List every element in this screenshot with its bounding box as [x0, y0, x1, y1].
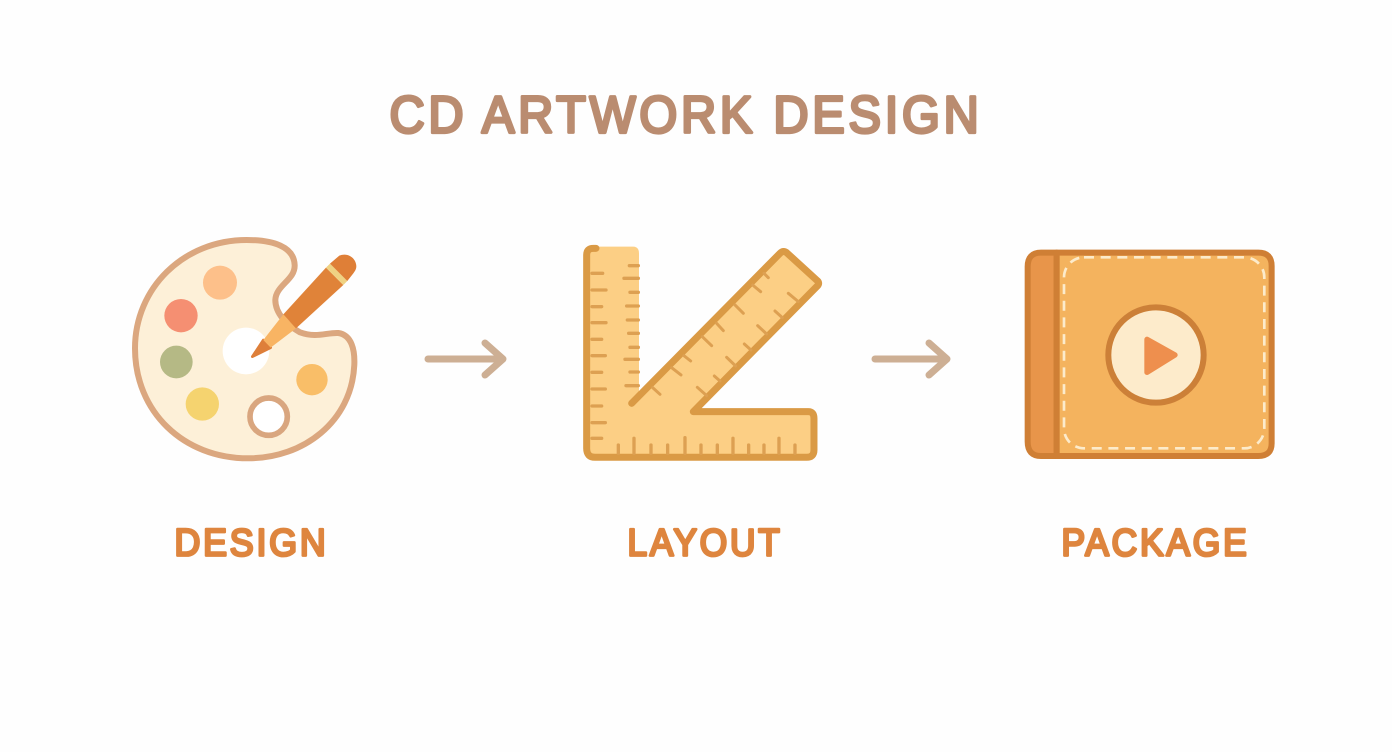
ruler outline — [587, 248, 819, 457]
title: CD ARTWORK DESIGN — [390, 86, 982, 144]
paintbrush — [252, 255, 356, 357]
stitching — [1064, 257, 1264, 448]
case front — [1057, 253, 1272, 456]
play disc — [1108, 307, 1204, 403]
icon: paint palette — [135, 240, 356, 458]
paint dabs — [160, 266, 328, 435]
play triangle — [1147, 339, 1175, 372]
arrow: layout to package — [875, 343, 947, 375]
palette body — [135, 240, 354, 458]
arrow: design to layout — [428, 343, 503, 375]
case spine — [1028, 253, 1057, 456]
ruler tick marks — [592, 266, 798, 453]
ruler fill — [587, 247, 820, 457]
icon: rulers — [587, 247, 820, 457]
icon: CD package — [1028, 253, 1272, 456]
label: package: PACKAGE — [1062, 522, 1250, 564]
label: layout: LAYOUT — [628, 522, 782, 564]
label: design: DESIGN — [174, 522, 328, 564]
